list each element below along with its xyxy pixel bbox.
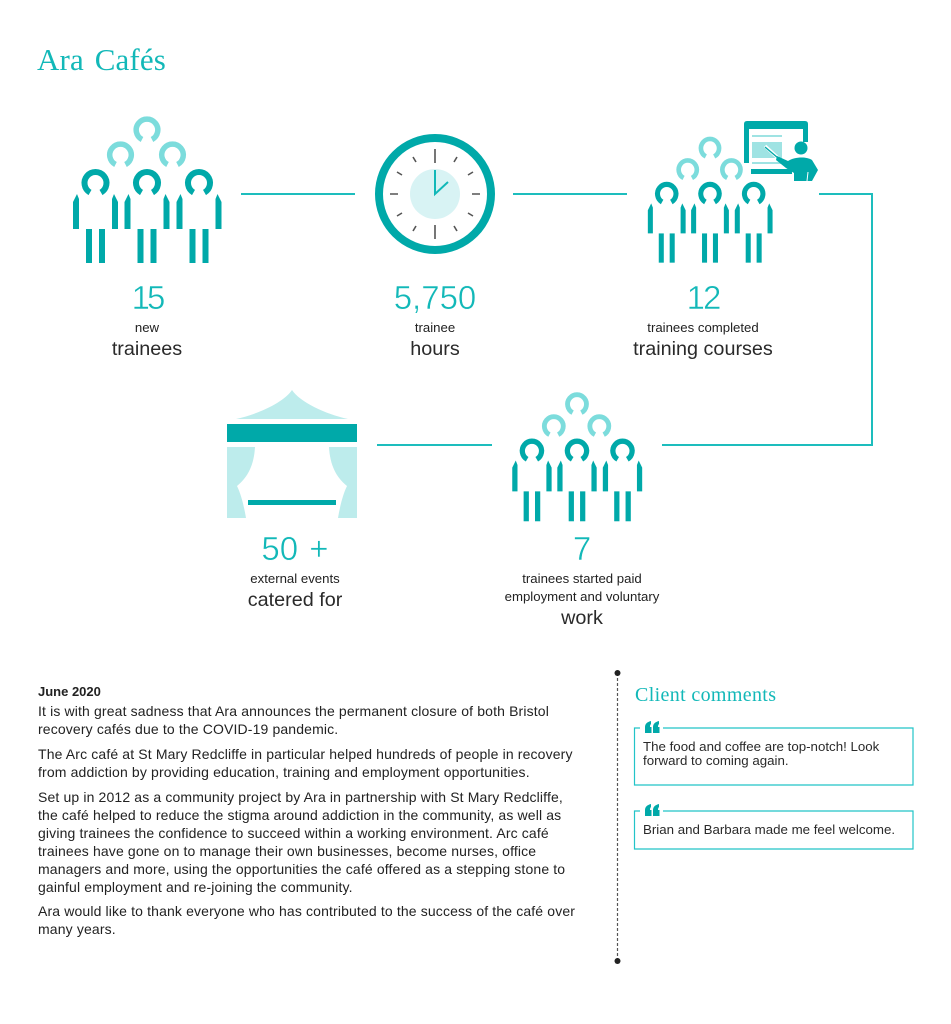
icon: quotation mark two [645,804,660,816]
stat: 7 trainees started paid employment and voluntary work: 7 [573,530,591,567]
text block: closure announcement: the café helped to reduce the stigma around addiction in the community, as well as [38,807,561,823]
icon: 7 trainees group [512,395,642,521]
icon: clock [379,138,491,250]
stat: 7 trainees started paid employment and voluntary work: employment and voluntary [505,589,659,604]
stat: 50+ external events catered for: 50 + [261,530,329,567]
comment two text: Brian and Barbara made me feel welcome. [643,822,895,837]
stat: 7 trainees started paid employment and voluntary work: trainees started paid [522,571,642,586]
comment one text: forward to coming again. [643,753,789,768]
text block: closure announcement: Ara would like to thank everyone who has contributed to the success of the café over [38,903,575,919]
comment box frames [634,728,913,849]
stat: 12 trainees completed training courses: trainees completed [647,320,759,335]
stat: 5,750 trainee hours: 5,750 [394,279,476,316]
stat: 50+ external events catered for: catered for [248,589,342,611]
text block: closure announcement: June 2020 [38,684,101,699]
stat: 50+ external events catered for [248,530,342,611]
comment one text: The food and coffee are top-notch! Look [643,739,879,754]
text block: closure announcement: Set up in 2012 as a community project by Ara in partnership with St Mary Redcliffe, [38,789,563,805]
stat: 5,750 trainee hours: trainee [415,320,455,335]
icon: event tent [227,390,357,518]
connector lines [241,194,872,445]
comment one text [643,739,880,768]
icon: presenter at board [744,121,818,181]
stat: 50+ external events catered for: external events [250,571,340,586]
text block: closure announcement: recovery cafés due to the COVID-19 pandemic. [38,721,338,737]
text block: closure announcement: from addiction by providing education, training and employment opportunities. [38,764,530,780]
stat: 5,750 trainee hours: hours [410,338,460,360]
text block: closure announcement: It is with great sadness that Ara announces the permanent closure of both Bristol [38,703,549,719]
stat: 12 trainees completed training courses: training courses [633,338,773,360]
stat: 7 trainees started paid employment and voluntary work [505,530,660,629]
text block: closure announcement [38,684,575,937]
text block: closure announcement: managers and more, using the opportunities the café offered as a stepping stone to [38,861,565,877]
text block: closure announcement: giving trainees the confidence to succeed within a working environment. Arc café [38,825,549,841]
text block: closure announcement: trainees have gone on to manage their own businesses, become nurses, office [38,843,536,859]
stat: 15 new trainees [112,279,182,360]
stat: 5,750 trainee hours [394,279,476,360]
text block: closure announcement: gainful employment and re-joining the community. [38,879,353,895]
icon: 15 new trainees group [73,119,222,263]
text block: closure announcement: many years. [38,921,116,937]
heading: client comments: Client comments [635,684,776,706]
title: Ara Cafés [37,42,166,77]
icon: 12 trainees group with presenter [648,121,818,263]
stat: 12 trainees completed training courses: 12 [687,279,719,316]
stat: 7 trainees started paid employment and voluntary work: work [561,607,603,629]
dotted timeline divider [614,670,620,964]
text block: closure announcement: The Arc café at St Mary Redcliffe in particular helped hundreds of people in recovery [38,746,573,762]
stat: 15 new trainees: trainees [112,338,182,360]
stat: 15 new trainees: new [135,320,159,335]
icon: quotation mark one [645,721,660,733]
stat: 12 trainees completed training courses [633,279,773,360]
stat: 15 new trainees: 15 [132,279,162,316]
